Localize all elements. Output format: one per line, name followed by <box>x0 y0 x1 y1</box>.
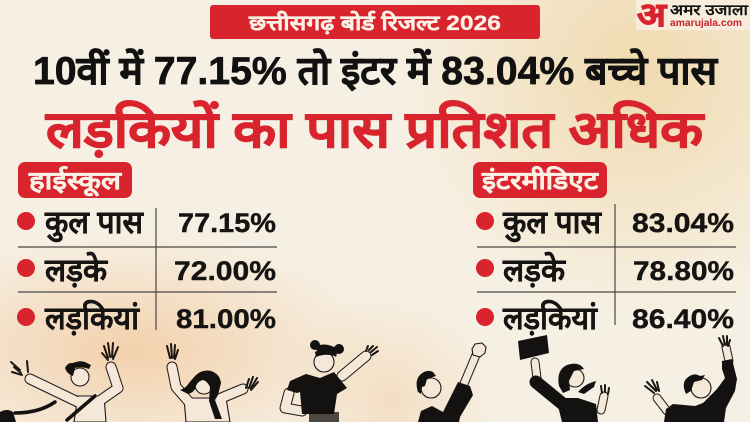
header banner: छत्तीसगढ़ बोर्ड रिजल्ट 2026 <box>248 10 501 35</box>
header banner <box>210 5 540 39</box>
subtitle: लड़कियों का पास प्रतिशत अधिक <box>45 100 705 158</box>
row: total pass: कुल पास <box>44 204 144 243</box>
illustration: girl with buns and black top <box>285 340 378 422</box>
logo: amarujala: amarujala.com <box>670 18 742 29</box>
row: girls: लड़कियां <box>502 299 599 336</box>
row: girls <box>476 299 734 336</box>
row: boys: 72.00% <box>174 256 276 286</box>
label: high school <box>18 162 132 198</box>
row: girls: 81.00% <box>176 304 276 334</box>
row: boys: लड़के <box>502 251 566 288</box>
illustration: boy with raised fist <box>417 343 486 422</box>
title: 10वीं में 77.15% तो इंटर में 83.04% बच्चे पास <box>33 48 719 93</box>
row: boys <box>17 251 276 288</box>
row: boys <box>476 251 734 288</box>
row: boys: 78.80% <box>633 256 734 286</box>
logo: amarujala <box>636 0 750 33</box>
row: girls: 86.40% <box>632 304 734 334</box>
row: total pass: 77.15% <box>178 208 276 238</box>
row: girls: लड़कियां <box>44 299 141 336</box>
label: intermediate: इंटरमीडिएट <box>481 166 600 195</box>
row: total pass <box>476 204 734 243</box>
label: high school: हाईस्कूल <box>28 166 122 197</box>
row: total pass: कुल पास <box>502 204 602 243</box>
illustration: cheering man with bag <box>0 343 118 422</box>
row: boys: लड़के <box>44 251 108 288</box>
row: total pass: 83.04% <box>632 208 734 238</box>
panel: high school <box>17 162 277 336</box>
label: intermediate <box>473 162 607 198</box>
illustration: cheering woman with braid <box>167 344 258 422</box>
panel: intermediate <box>473 162 736 336</box>
illustration: man with arms raised <box>645 336 737 422</box>
logo: amarujala: अमर उजाला <box>670 2 749 19</box>
illustration: girl holding book <box>518 335 609 422</box>
row: girls <box>17 299 276 336</box>
row: total pass <box>17 204 276 243</box>
